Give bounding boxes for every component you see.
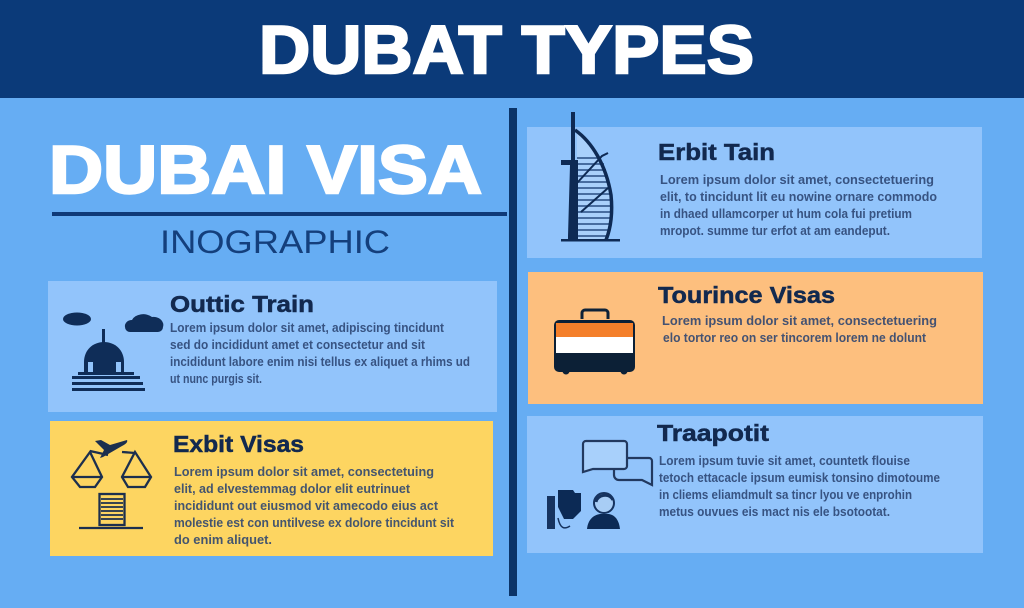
panel text: in cliems eliamdmult sa tincr lyou ve enprohin — [659, 488, 912, 502]
panel text: in dhaed ullamcorper ut hum cola fui pretium — [660, 207, 912, 221]
panel heading: Outtic Train — [170, 291, 314, 317]
panel text: sed do incididunt amet et consectetur and sit — [170, 338, 426, 352]
panel heading: Tourince Visas — [658, 282, 835, 308]
panel heading: Exbit Visas — [173, 431, 304, 457]
panel text: elo tortor reo on ser tincorem lorem ne dolunt — [663, 331, 927, 345]
heading rule — [52, 212, 507, 216]
panel text — [659, 454, 940, 519]
panel text — [662, 314, 937, 345]
panel: Exbit Visas — [50, 421, 493, 556]
panel text — [174, 465, 455, 547]
left heading block — [49, 132, 507, 260]
panel text: ut nunc purgis sit. — [170, 372, 262, 386]
panel text — [170, 321, 470, 386]
panel text: Lorem ipsum dolor sit amet, consectetuering — [662, 314, 937, 328]
panel text: do enim aliquet. — [174, 533, 272, 547]
main heading: DUBAI VISA — [49, 132, 482, 208]
panel text: tetoch ettacacle ipsum eumisk tonsino dimotoume — [659, 471, 940, 485]
panel: Erbit Tain — [527, 112, 982, 258]
icon: domed building with clouds — [63, 312, 163, 391]
panel text: Lorem ipsum tuvie sit amet, countetk flouise — [659, 454, 910, 468]
panel text: elit, ad elvestemmag dolor elit eutrinuet — [174, 482, 411, 496]
center divider — [509, 108, 517, 596]
panel text: mropot. summe tur erfot at am eandeput. — [660, 224, 890, 238]
panel text: metus ouvues eis mact nis ele bsotootat. — [659, 505, 890, 519]
panel text: Lorem ipsum dolor sit amet, adipiscing tincidunt — [170, 321, 445, 335]
panel text — [660, 173, 937, 238]
panel: Traapotit — [527, 416, 983, 553]
panel text: Lorem ipsum dolor sit amet, consectetuing — [174, 465, 434, 479]
icon: speech bubbles and people — [547, 441, 652, 529]
header banner — [0, 0, 1024, 98]
panel heading: Traapotit — [657, 420, 769, 446]
panel: Outtic Train — [48, 281, 497, 412]
panel text: elit, to tincidunt lit eu nowine ornare commodo — [660, 190, 937, 204]
icon: sail-shaped tower — [561, 112, 620, 242]
icon: scales with plane and document stack — [72, 440, 151, 528]
subheading: INOGRAPHIC — [160, 224, 390, 260]
panel text: Lorem ipsum dolor sit amet, consectetuering — [660, 173, 934, 187]
icon: suitcase — [554, 310, 635, 374]
panel heading: Erbit Tain — [658, 139, 775, 165]
panel text: incididunt labore enim nisi tellus ex aliquet a rhims ud — [170, 355, 470, 369]
panel: Tourince Visas — [528, 272, 983, 404]
panel text: molestie est con untilvese ex dolore tincidunt sit — [174, 516, 455, 530]
panel text: incididunt out eiusmod vit amecodo eius act — [174, 499, 439, 513]
title: DUBAT TYPES — [259, 12, 754, 88]
